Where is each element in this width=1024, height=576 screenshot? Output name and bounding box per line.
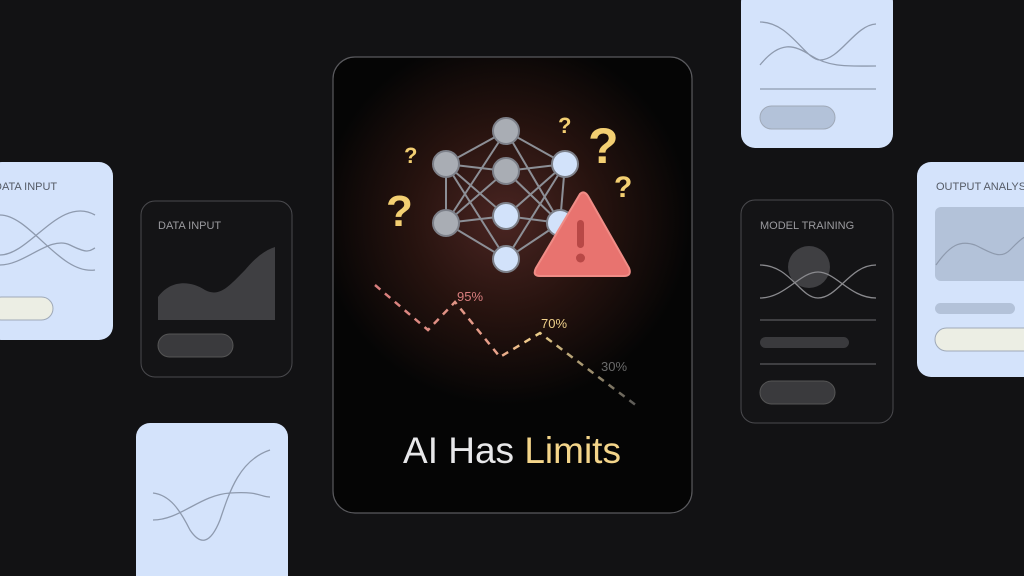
card: output analysis	[917, 162, 1024, 377]
card: model training: MODEL TRAINING	[760, 220, 854, 232]
icon: question marks: ?	[558, 113, 571, 138]
title: AI Has Limits	[403, 430, 621, 471]
card: dark data input: DATA INPUT	[158, 220, 221, 232]
icon: neural network	[433, 118, 578, 272]
card: model training	[741, 200, 893, 423]
icon: question marks	[386, 113, 632, 236]
card: dark data input	[141, 201, 292, 377]
chart: declining accuracy dashed line	[375, 285, 637, 406]
card: top-right light card	[741, 0, 893, 148]
icon: question marks: ?	[386, 187, 413, 236]
chart: declining accuracy dashed line: 70%	[541, 316, 567, 331]
icon: warning triangle	[535, 192, 630, 276]
card: bottom-left light chart	[136, 423, 288, 576]
chart: declining accuracy dashed line: 30%	[601, 359, 627, 374]
icon: question marks: ?	[614, 171, 632, 204]
panel: center main card	[333, 57, 692, 513]
chart: declining accuracy dashed line: 95%	[457, 289, 483, 304]
icon: question marks: ?	[588, 118, 619, 174]
icon: question marks: ?	[404, 143, 417, 168]
card: left light data input	[0, 162, 113, 340]
